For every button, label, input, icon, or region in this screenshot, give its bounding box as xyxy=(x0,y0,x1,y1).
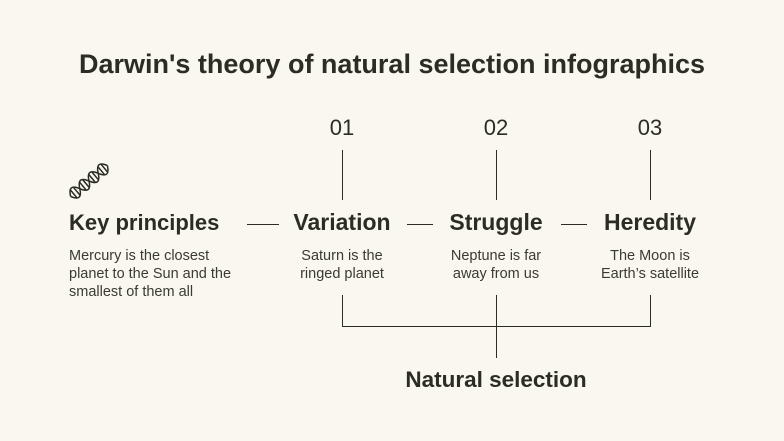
text: variation xyxy=(300,248,384,282)
label: natural selection: Natural selection xyxy=(405,367,587,392)
text: heredity xyxy=(601,248,699,282)
title: Darwin's theory of natural selection infographics xyxy=(79,49,705,79)
heading: key principles: Key principles xyxy=(69,210,219,235)
bracket connector xyxy=(342,295,651,358)
text: heredity: The Moon is xyxy=(610,248,690,264)
text: key principles: Mercury is the closest xyxy=(69,248,209,264)
number 01: 01 xyxy=(330,115,354,140)
text: heredity: Earth’s satellite xyxy=(601,266,699,282)
text: variation: ringed planet xyxy=(300,266,384,282)
text: variation: Saturn is the xyxy=(301,248,383,264)
text: struggle: away from us xyxy=(453,266,539,282)
text: key principles xyxy=(69,248,231,300)
text: struggle xyxy=(451,248,541,282)
heading: variation: Variation xyxy=(293,209,391,235)
text: key principles: smallest of them all xyxy=(69,284,193,300)
heading: struggle: Struggle xyxy=(449,209,543,235)
icon: dna xyxy=(69,163,109,199)
heading: heredity: Heredity xyxy=(604,209,696,235)
number 02: 02 xyxy=(484,115,508,140)
text: struggle: Neptune is far xyxy=(451,248,541,264)
text: key principles: planet to the Sun and the xyxy=(69,266,231,282)
number 03: 03 xyxy=(638,115,662,140)
